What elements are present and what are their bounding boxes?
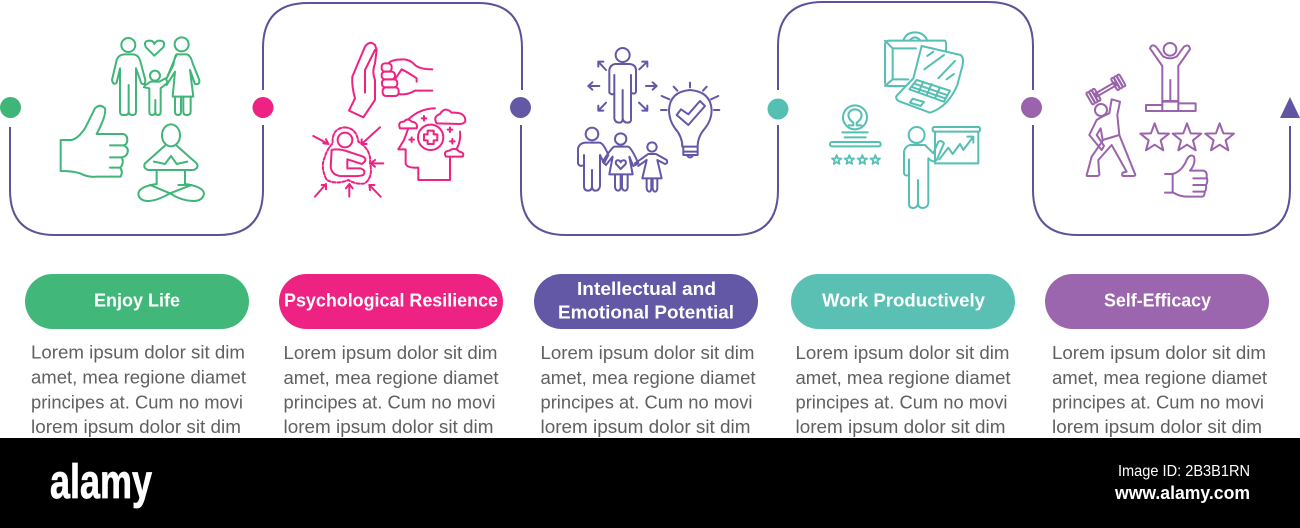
icon: meditating person bbox=[138, 124, 204, 201]
icon: family bbox=[112, 37, 199, 115]
arrow head: end of timeline bbox=[1280, 97, 1300, 118]
text block: psychological resilience: Lorem ipsum dolor sit dim bbox=[284, 343, 498, 363]
text block: psychological resilience: amet, mea regione diamet bbox=[284, 368, 498, 388]
icon group: work productively bbox=[830, 32, 980, 208]
text block: intellectual and emotional potential: amet, mea regione diamet bbox=[540, 368, 756, 388]
text block: enjoy life: principes at. Cum no movi bbox=[31, 392, 243, 412]
icon: hand stopping fist bbox=[349, 43, 432, 117]
icon group: psychological resilience bbox=[313, 43, 465, 197]
text block: work productively: principes at. Cum no movi bbox=[796, 392, 1008, 412]
icon: thumbs up bbox=[61, 106, 128, 177]
pill: enjoy life bbox=[25, 274, 249, 329]
website: www.alamy.com bbox=[1114, 483, 1250, 503]
icon: protected person with arrows bbox=[313, 127, 383, 197]
icon group: intellectual and emotional potential bbox=[578, 48, 719, 192]
icon: person with arrows bbox=[588, 48, 657, 123]
node: pink bbox=[252, 97, 274, 118]
icon: person lifting dumbbell bbox=[1086, 74, 1135, 176]
text block: work productively: amet, mea regione diamet bbox=[796, 368, 1010, 388]
text block: intellectual and emotional potential: principes at. Cum no movi bbox=[540, 392, 752, 412]
pill: work productively: Work Productively bbox=[822, 290, 985, 310]
pill: intellectual and emotional potential: Intellectual and bbox=[577, 279, 716, 299]
icon: presenter with chart bbox=[904, 127, 980, 208]
text block: enjoy life: amet, mea regione diamet bbox=[31, 368, 246, 388]
node: green bbox=[0, 97, 21, 118]
text block: psychological resilience bbox=[284, 343, 498, 437]
icon: light bulb with check bbox=[661, 83, 719, 157]
pill: self-efficacy bbox=[1045, 274, 1269, 329]
text block: self-efficacy: principes at. Cum no movi bbox=[1052, 392, 1264, 412]
watermark bar bbox=[0, 438, 1300, 528]
node: violet bbox=[1021, 97, 1042, 118]
icon group: self-efficacy bbox=[1086, 43, 1234, 197]
text block: enjoy life bbox=[31, 342, 246, 437]
icon: head with medical cross and clouds bbox=[398, 108, 465, 180]
pill: work productively bbox=[791, 274, 1015, 329]
pill: intellectual and emotional potential: Emotional Potential bbox=[558, 302, 734, 322]
text block: work productively bbox=[796, 343, 1010, 437]
text block: enjoy life: lorem ipsum dolor sit dim bbox=[31, 417, 241, 437]
text block: enjoy life: Lorem ipsum dolor sit dim bbox=[31, 342, 245, 362]
text block: psychological resilience: lorem ipsum dolor sit dim bbox=[284, 417, 494, 437]
icon: three stars bbox=[1140, 123, 1234, 150]
text block: self-efficacy bbox=[1052, 343, 1267, 437]
text block: intellectual and emotional potential bbox=[540, 343, 756, 437]
image id: Image ID: 2B3B1RN bbox=[1118, 463, 1250, 480]
text block: self-efficacy: lorem ipsum dolor sit dim bbox=[1052, 417, 1262, 437]
pill: intellectual and emotional potential bbox=[534, 274, 758, 329]
icon: briefcase and laptop bbox=[885, 32, 963, 113]
text block: work productively: lorem ipsum dolor sit dim bbox=[796, 417, 1006, 437]
icon: family of three bbox=[578, 128, 667, 192]
pill: psychological resilience: Psychological Resilience bbox=[284, 290, 498, 310]
icon: thumbs up bbox=[1165, 156, 1207, 197]
text block: intellectual and emotional potential: Lorem ipsum dolor sit dim bbox=[540, 343, 754, 363]
text block: work productively: Lorem ipsum dolor sit dim bbox=[796, 343, 1010, 363]
text block: self-efficacy: amet, mea regione diamet bbox=[1052, 368, 1267, 388]
node: teal bbox=[768, 98, 788, 120]
timeline frame bbox=[10, 2, 1290, 235]
pill: self-efficacy: Self-Efficacy bbox=[1104, 290, 1211, 310]
pill: psychological resilience bbox=[279, 274, 503, 329]
icon: rating badge with stars bbox=[830, 105, 881, 164]
text block: intellectual and emotional potential: lorem ipsum dolor sit dim bbox=[540, 417, 750, 437]
logo: alamy: alamy bbox=[50, 456, 152, 509]
node: indigo bbox=[510, 97, 531, 118]
icon group: enjoy life bbox=[61, 37, 204, 201]
text block: psychological resilience: principes at. Cum no movi bbox=[284, 392, 496, 412]
text block: self-efficacy: Lorem ipsum dolor sit dim bbox=[1052, 343, 1266, 363]
icon: person on podium bbox=[1146, 43, 1196, 111]
pill: enjoy life: Enjoy Life bbox=[94, 290, 180, 310]
